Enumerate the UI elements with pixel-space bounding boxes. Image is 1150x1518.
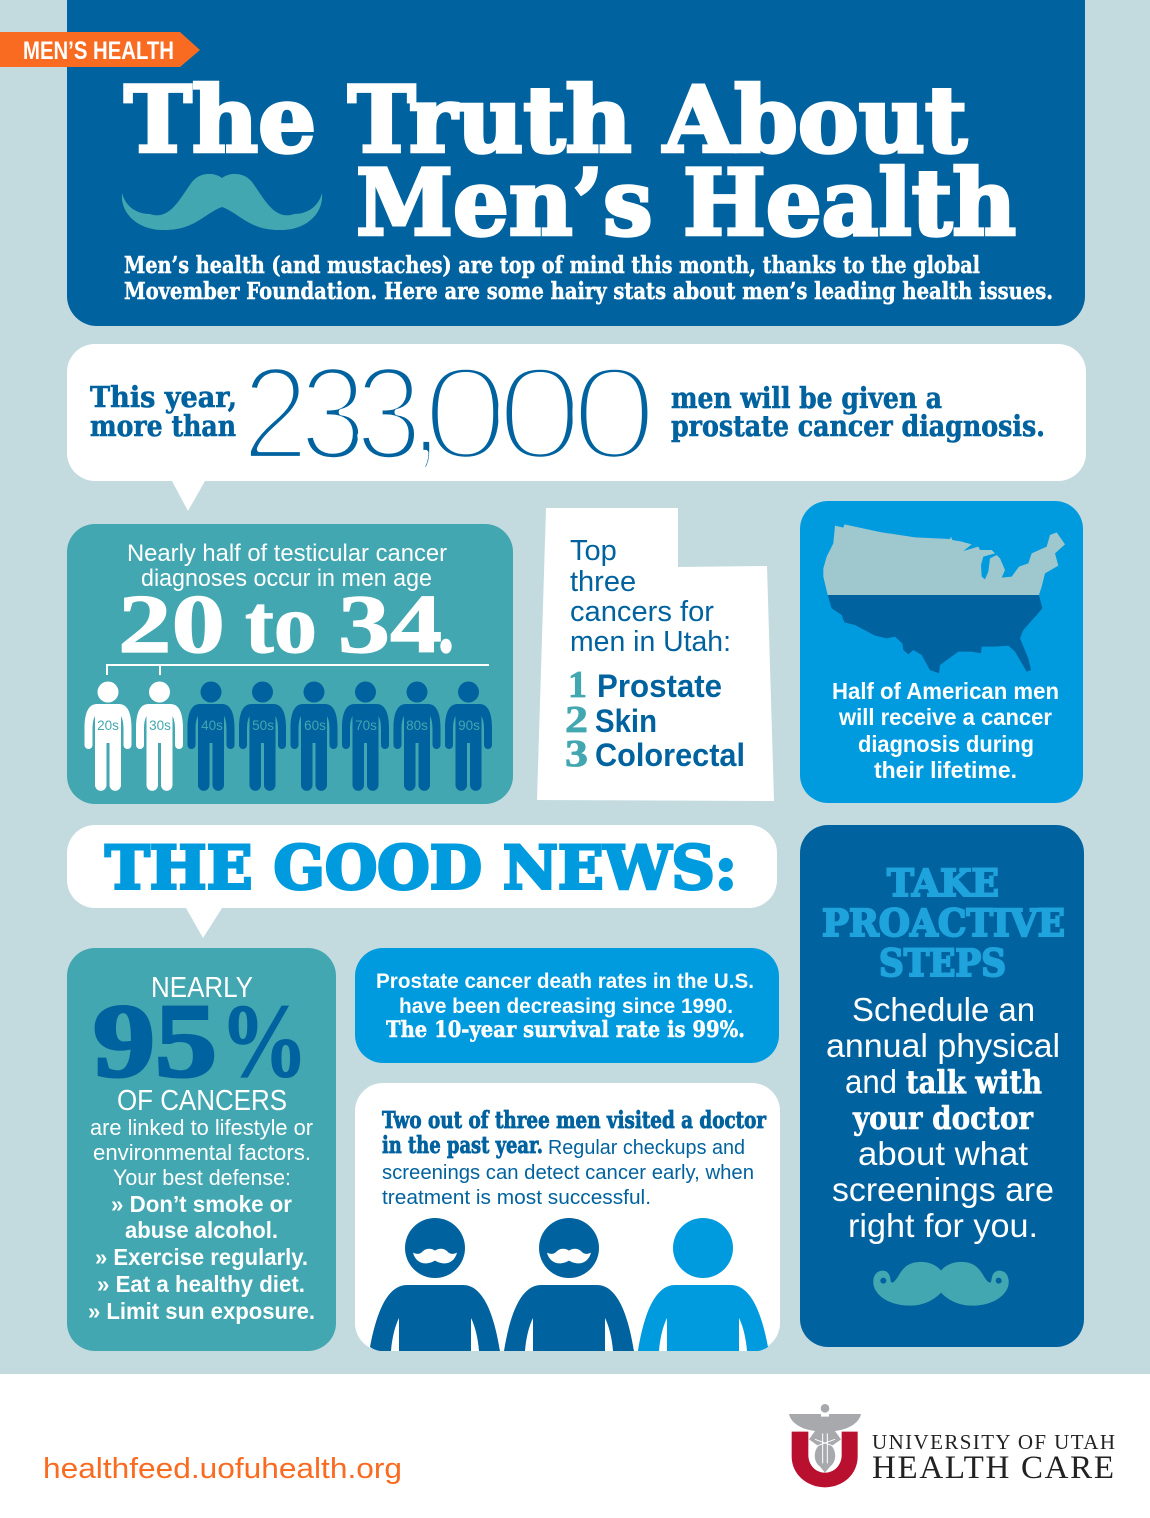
panel: half of American men	[800, 501, 1083, 803]
panel text: Regular checkups and	[548, 1137, 745, 1159]
panel text: Two out of three men visited a doctor	[382, 1107, 767, 1134]
explanation: are linked to lifestyle or	[90, 1115, 313, 1140]
explanation	[90, 1115, 313, 1190]
icon: man with mustache	[504, 1218, 634, 1351]
category banner	[0, 32, 200, 67]
ranked list: 2	[565, 699, 588, 741]
panel heading: men in Utah:	[570, 626, 731, 658]
logo: University of Utah Health Care	[789, 1404, 1115, 1487]
age range: .	[438, 578, 454, 671]
explanation: environmental factors.	[93, 1140, 311, 1165]
panel text: screenings can detect cancer early, when	[382, 1162, 754, 1184]
speech bubble: good news heading	[67, 825, 777, 938]
ranked list: Skin	[595, 703, 657, 739]
panel heading: cancers for	[570, 596, 714, 628]
panel: prostate death rates: Prostate cancer death rates in the U.S.	[376, 970, 754, 993]
follow-on text: prostate cancer diagnosis.	[671, 409, 1045, 443]
icon: mustache	[122, 174, 322, 230]
logo: University of Utah Health Care: HEALTH CARE	[872, 1450, 1114, 1486]
ranked list: Colorectal	[595, 737, 745, 773]
panel text: Nearly half of testicular cancer	[127, 540, 447, 567]
panel: prostate death rates: The 10-year survival rate is 99%.	[386, 1017, 745, 1043]
title	[124, 68, 1016, 256]
panel text: your doctor	[852, 1099, 1034, 1137]
age range: 34	[338, 578, 442, 671]
big percentage	[93, 982, 308, 1099]
footer	[0, 1374, 1150, 1518]
bracket	[107, 665, 489, 675]
ranked list: 1	[568, 664, 587, 706]
category banner: MEN’S HEALTH	[23, 37, 174, 65]
logo: University of Utah Health Care: UNIVERSITY OF UTAH	[872, 1430, 1115, 1454]
defense list	[88, 1191, 315, 1324]
website url: healthfeed.uofuhealth.org	[43, 1453, 402, 1485]
panel text: diagnoses occur in men age	[141, 565, 432, 592]
big percentage: %	[220, 982, 308, 1099]
title: The Truth About	[124, 68, 967, 174]
defense list: » Limit sun exposure.	[88, 1298, 315, 1324]
panel text: screenings are	[832, 1171, 1054, 1208]
panel text: about what	[858, 1135, 1028, 1172]
icon: man with mustache	[370, 1218, 500, 1351]
follow-on text: men will be given a	[671, 381, 942, 415]
intro text: Men’s health (and mustaches) are top of mind this month, thanks to the global	[124, 252, 980, 279]
age figures: 50s	[252, 718, 274, 733]
panel: 95 percent of cancers	[67, 948, 336, 1351]
panel: doctor visits	[355, 1083, 780, 1351]
big number	[242, 332, 658, 487]
defense list: » Don’t smoke or	[111, 1191, 292, 1217]
title: Men’s Health	[356, 150, 1016, 256]
panel text	[826, 991, 1060, 1244]
panel: testicular cancer ages	[67, 524, 513, 804]
panel text: will receive a cancer	[838, 704, 1052, 730]
panel heading	[822, 861, 1065, 985]
panel label: NEARLY	[151, 972, 253, 1004]
defense list: » Eat a healthy diet.	[97, 1271, 305, 1297]
ranked list: Prostate	[597, 668, 722, 704]
age figures: 40s	[201, 718, 223, 733]
panel heading: Top	[570, 535, 617, 567]
header panel	[67, 0, 1085, 326]
panel text: in the past year.	[382, 1132, 543, 1159]
age figures: 70s	[355, 718, 377, 733]
lead-in text: more than	[90, 409, 236, 443]
big number: 233,	[242, 332, 443, 487]
panel heading: TAKE	[887, 861, 999, 905]
big percentage: 95	[93, 982, 217, 1099]
panel text	[832, 678, 1059, 783]
age figures: 20s	[97, 718, 119, 733]
panel text: treatment is most successful.	[382, 1187, 651, 1209]
ranked list	[565, 664, 745, 775]
panel heading: PROACTIVE	[822, 901, 1065, 945]
panel text: talk with	[906, 1063, 1042, 1101]
defense list: » Exercise regularly.	[95, 1244, 308, 1270]
panel text: right for you.	[848, 1207, 1038, 1244]
lead-in text	[90, 380, 237, 443]
age figures: 30s	[149, 718, 171, 733]
explanation: Your best defense:	[113, 1165, 291, 1190]
speech bubble: good news heading: THE GOOD NEWS:	[105, 834, 737, 904]
panel heading: STEPS	[879, 941, 1006, 985]
age range: 20	[118, 578, 225, 671]
panel: take proactive steps	[800, 825, 1084, 1347]
panel text: annual physical	[826, 1027, 1060, 1064]
age figures: 80s	[406, 718, 428, 733]
big number: 000	[422, 338, 658, 487]
speech bubble: prostate stat	[67, 332, 1086, 511]
age figures	[84, 682, 492, 791]
panel text: their lifetime.	[874, 757, 1017, 783]
panel text: diagnosis during	[858, 731, 1034, 757]
panel heading: three	[570, 566, 636, 598]
panel heading	[570, 535, 731, 658]
age figures: 60s	[304, 718, 326, 733]
ranked list: 3	[565, 733, 588, 775]
panel text	[382, 1107, 767, 1209]
panel: prostate death rates	[355, 948, 779, 1063]
map: United States split in half	[823, 524, 1065, 673]
panel: Utah top three cancers	[537, 508, 774, 801]
lead-in text: This year,	[90, 380, 237, 414]
follow-on text	[671, 381, 1045, 443]
age range	[118, 578, 454, 671]
defense list: abuse alcohol.	[125, 1217, 278, 1243]
panel text: OF CANCERS	[117, 1085, 287, 1117]
icon: curled mustache	[873, 1262, 1009, 1306]
panel text	[127, 540, 447, 592]
intro text	[124, 252, 1053, 305]
panel text: Half of American men	[832, 678, 1059, 704]
icon: man without mustache	[638, 1218, 768, 1351]
age figures: 90s	[458, 718, 480, 733]
panel text: and	[845, 1063, 897, 1100]
age range: to	[245, 578, 317, 671]
panel text: Schedule an	[852, 991, 1035, 1028]
panel: prostate death rates: have been decreasing since 1990.	[399, 995, 733, 1018]
